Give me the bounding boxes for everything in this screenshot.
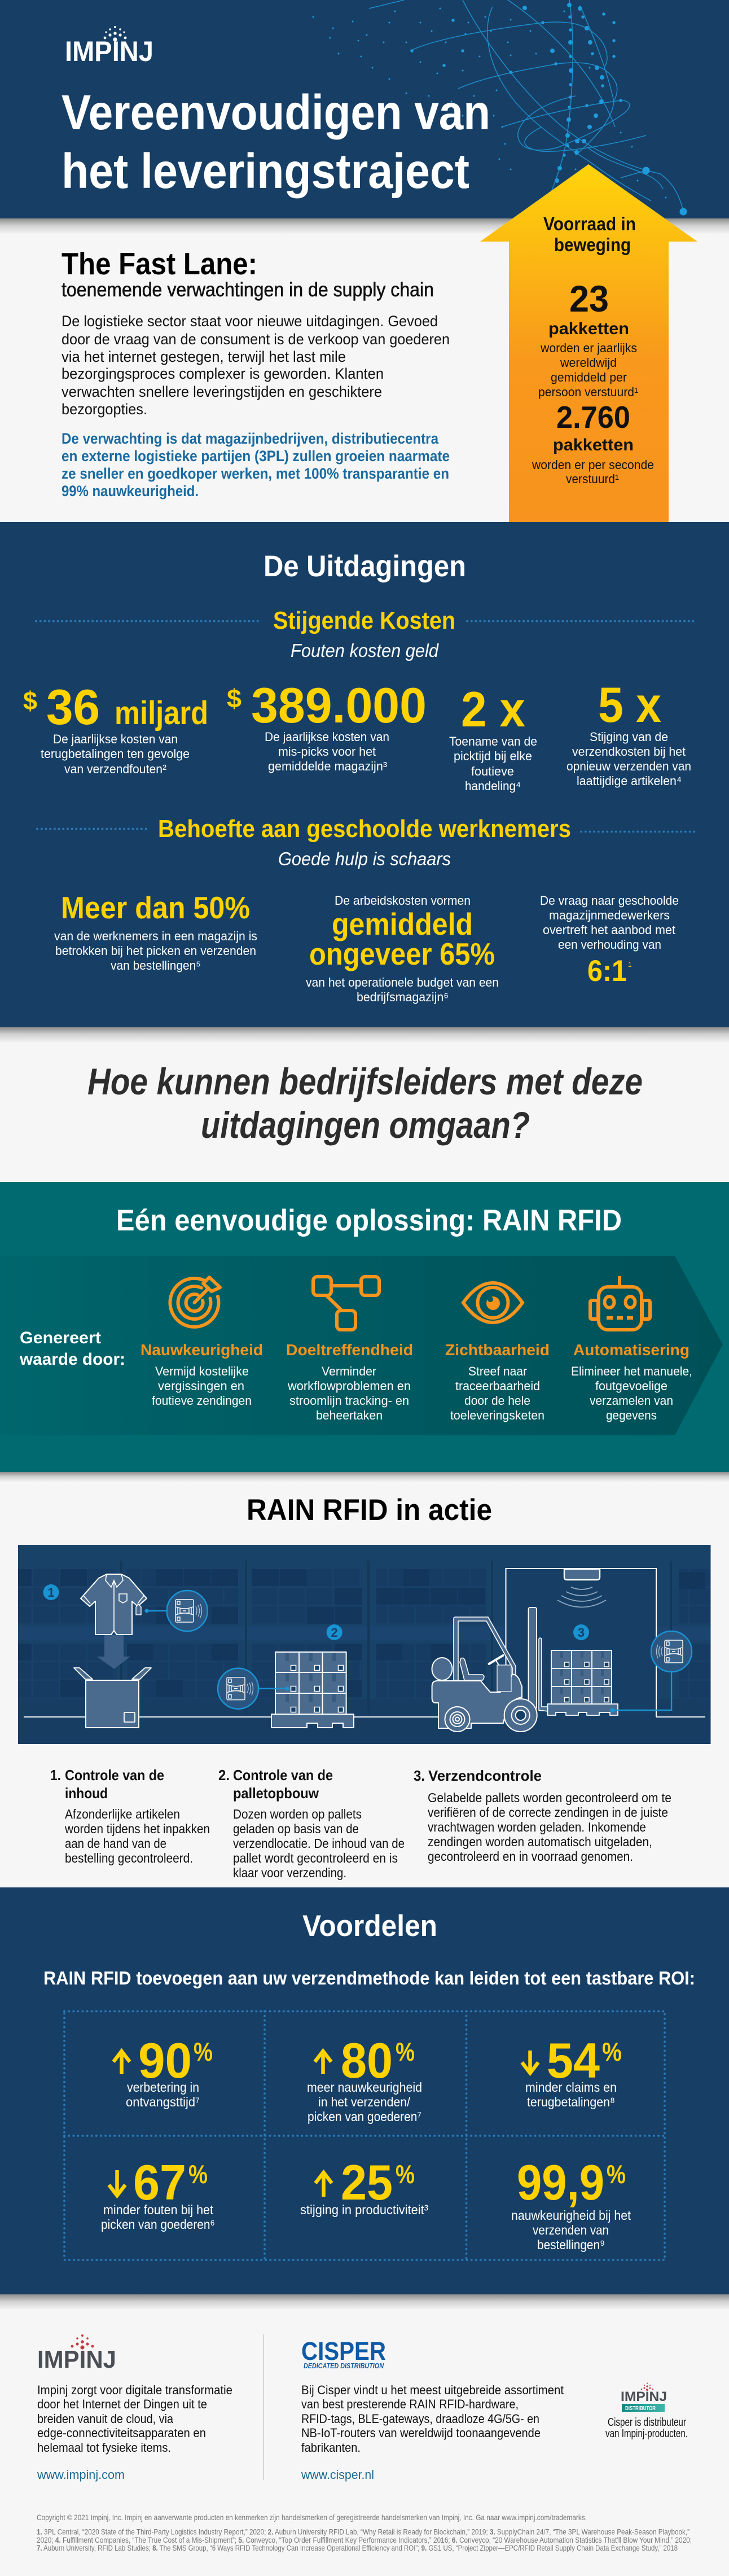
paragraph: helemaal tot fysieke items. (37, 2441, 171, 2455)
paragraph: Bij Cisper vindt u het meest uitgebreide assortiment (301, 2383, 564, 2397)
distributor badge: van Impinj-producten. (605, 2428, 688, 2440)
blue callout paragraph: ze sneller en goedkoper werken, met 100% transparantie en (62, 465, 449, 482)
stat: gemiddeld ongeveer 65%: van het operationele budget van een (306, 975, 499, 989)
icon: robot (590, 1276, 650, 1330)
stat: 23 pakketten: 23 (569, 278, 609, 319)
stat: Meer dan 50%: Meer dan 50% (61, 890, 250, 925)
pallet with boxes 2 (271, 1652, 354, 1728)
stat: 54%: terugbetalingen⁸ (527, 2095, 615, 2109)
paragraph (37, 2383, 232, 2455)
subheading: Stijgende Kosten: Stijgende Kosten (273, 607, 455, 634)
stat: 80%: % (396, 2037, 415, 2066)
column: Doeltreffendheid (286, 1277, 413, 1422)
blue callout paragraph: 99% nauwkeurigheid. (62, 483, 199, 500)
stat: 90%: ontvangsttijd⁷ (126, 2095, 200, 2109)
stat: 5 x: laattijdige artikelen⁴ (577, 774, 682, 788)
column: Zichtbaarheid: Streef naar (468, 1364, 527, 1378)
panel: orange arrow stats (480, 164, 697, 522)
stat: $36 miljard: van verzendfouten² (64, 762, 166, 776)
stat: 90%: verbetering in (127, 2080, 199, 2095)
text block: step 2: verzendlocatie. De inhoud van de (233, 1836, 405, 1851)
stat: 23 pakketten: gemiddeld per (551, 370, 627, 384)
stat: 80%: in het verzenden/ (318, 2095, 411, 2109)
panel: De Uitdagingen (0, 522, 729, 1043)
stat: 25% (300, 2154, 428, 2217)
column: Doeltreffendheid: stroomlijn tracking- en (289, 1394, 409, 1408)
text block: step 2: klaar voor verzending. (233, 1865, 346, 1880)
body paragraph: via het internet gestegen, terwijl het last mile (62, 348, 346, 365)
copyright and references: 7. Auburn University, RFID Lab Studies; 8. The SMS Group, “6 Ways RFID Technology Can Increase Operational Efficiency and ROI”; 9. GS1 US, “Project Zipper—EPC/RFID Retail Supply Chain Data Exchange Study,” 2018 (37, 2543, 678, 2552)
badge 1: 1 (47, 1585, 55, 1600)
stat: $36 miljard: 36 (46, 679, 100, 735)
column: Zichtbaarheid (445, 1283, 550, 1422)
stat: 90%: % (194, 2037, 213, 2066)
logo: Impinj: IMPINJ (65, 36, 153, 67)
paragraph: van best presterende RAIN RFID-hardware, (301, 2397, 519, 2411)
stat: 80% (307, 2032, 422, 2124)
copyright and references: 2020; 4. Fulfillment Companies, “The True Cost of a Mis-Shipment”; 5. Conveyco, “Top Order Fulfillment Key Performance Indicators,” 2016; 6. Conveyco, “20 Warehouse Automation Statistics That’ll Blow Your Mind,” 2020; (37, 2535, 692, 2544)
badge 3: 3 (578, 1626, 585, 1640)
arrow heading: Voorraad in (543, 213, 636, 234)
distributor badge: DISTRIBUTOR (625, 2406, 656, 2412)
text block: step 1: Afzonderlijke artikelen (65, 1807, 180, 1821)
panel: RAIN RFID oplossing (0, 1182, 729, 1482)
stat: 23 pakketten: pakketten (548, 319, 629, 338)
conveyor ground line (24, 1716, 705, 1718)
body paragraph: bezorgingsproces complexer is geworden. Klanten (62, 365, 384, 382)
column: Doeltreffendheid: Doeltreffendheid (286, 1341, 413, 1359)
heading: Eén eenvoudige oplossing: RAIN RFID (116, 1204, 622, 1237)
paragraph: edge-connectiviteitsapparaten en (37, 2426, 206, 2440)
arrow heading: beweging (554, 234, 631, 255)
text block: step 2 (218, 1767, 405, 1880)
column: Zichtbaarheid: Zichtbaarheid (445, 1341, 550, 1359)
text block: step 2: pallet wordt gecontroleerd en is (233, 1851, 398, 1865)
body paragraph: door de vraag van de consument is de verkoop van goederen (62, 331, 450, 348)
panel: Impinj footer (37, 2334, 232, 2482)
icon: workflow nodes (313, 1277, 379, 1330)
icon: eye (463, 1283, 522, 1322)
stat: 99,9%: nauwkeurigheid bij het (511, 2208, 631, 2223)
stat: $389.000: gemiddelde magazijn³ (268, 759, 387, 773)
arrow: shirt into box (97, 1635, 130, 1669)
stat: gemiddeld ongeveer 65% (306, 893, 499, 1004)
stat: 99,9% (511, 2154, 631, 2252)
text block: step 2: Dozen worden op pallets (233, 1807, 362, 1821)
RFID reader (564, 1569, 600, 1580)
column: Automatisering: foutgevoelige (595, 1379, 667, 1393)
column: Doeltreffendheid: workflowproblemen en (287, 1379, 411, 1393)
stat: Meer dan 50%: betrokken bij het picken en verzenden (55, 944, 256, 958)
stat: $389.000 (227, 677, 427, 773)
column: Automatisering: gegevens (606, 1408, 657, 1422)
title (62, 85, 490, 199)
body paragraph: bezorgopties. (62, 401, 147, 418)
stat: 54% (522, 2032, 622, 2109)
stat: $389.000: De jaarlijkse kosten van (265, 730, 389, 744)
label: genereert waarde door (19, 1329, 125, 1369)
stat: Meer dan 50% (54, 890, 257, 972)
text block: step 1 (50, 1767, 210, 1865)
stat: 2 x: 2 x (461, 681, 525, 737)
stat: 5 x: opnieuw verzenden van (566, 759, 691, 773)
column: Nauwkeurigheid: Vermijd kostelijke (155, 1364, 249, 1378)
stat: $36 miljard: terugbetalingen ten gevolge (41, 747, 190, 761)
badge 2 (327, 1624, 342, 1640)
blue callout paragraph: en externe logistieke partijen (3PL) zullen groeien naarmate (62, 448, 450, 465)
label: genereert waarde door: waarde door: (19, 1350, 125, 1369)
stat: 54%: 54 (547, 2032, 600, 2088)
heading: The Fast Lane: The Fast Lane: (62, 246, 257, 281)
subheading: Stijgende Kosten: Fouten kosten geld (291, 640, 440, 661)
question heading (87, 1061, 643, 1146)
stat: 90% (113, 2032, 213, 2109)
dock door (506, 1569, 656, 1717)
subheading: Stijgende Kosten (36, 607, 693, 661)
stat: $36 miljard: De jaarlijkse kosten van (53, 732, 178, 746)
stat: 2 x: picktijd bij elke (454, 749, 532, 763)
stat: 23 pakketten: persoon verstuurd¹ (538, 385, 638, 399)
stat: 54%: minder claims en (525, 2080, 617, 2095)
stat: 25%: % (396, 2159, 415, 2189)
subheading: Behoefte aan geschoolde werknemers: Behoefte aan geschoolde werknemers (158, 815, 571, 843)
text block: step 3 (414, 1767, 671, 1864)
stat: 99,9%: 99,9 (517, 2154, 604, 2210)
column: Nauwkeurigheid: foutieve zendingen (152, 1394, 252, 1408)
stat: 6:1: De vraag naar geschoolde (540, 893, 679, 908)
title: Vereenvoudigen van (62, 85, 490, 140)
logo: Impinj dark: IMPINJ (37, 2346, 116, 2373)
heading: Voordelen (302, 1909, 437, 1943)
stat: 67%: % (188, 2159, 208, 2189)
stat: $36 miljard: miljard (115, 695, 208, 731)
stat: 2 x: Toename van de (449, 734, 537, 748)
stat: 67%: minder fouten bij het (103, 2202, 214, 2217)
arrow heading (543, 213, 636, 255)
dotted grid (64, 2012, 665, 2260)
stat: $36 miljard: $ (23, 686, 37, 715)
subheading: Behoefte aan geschoolde werknemers: Goede hulp is schaars (278, 848, 451, 869)
network artwork (369, 0, 683, 211)
stat: $389.000: $ (227, 684, 241, 713)
copyright and references: Copyright © 2021 Impinj, Inc. Impinj en aanverwante producten en kenmerken zijn handelsmerken of geregistreerde handelsmerken van Impinj, Inc. Ga naar www.impinj.com/trademarks. (37, 2513, 587, 2522)
text block: step 1: 1. (50, 1767, 61, 1784)
divider (263, 2334, 264, 2480)
stat: 2 x: foutieve (471, 764, 514, 778)
column: Automatisering: Elimineer het manuele, (571, 1364, 692, 1378)
text block: step 3: 3. (414, 1767, 425, 1784)
badge 3 (573, 1624, 589, 1640)
logo: Cisper: CISPER (301, 2337, 386, 2365)
label: genereert waarde door: Genereert (20, 1329, 101, 1347)
icon: shirt (81, 1574, 147, 1635)
stat: 25%: 25 (341, 2154, 393, 2210)
stat: 5 x: verzendkosten bij het (572, 744, 686, 759)
paragraph: RFID-tags, BLE-gateways, draadloze 4G/5G- en (301, 2412, 539, 2426)
subheading: toenemende verwachtingen in de supply chain (62, 279, 434, 301)
stat: 90%: 90 (138, 2032, 192, 2088)
blue callout paragraph: De verwachting is dat magazijnbedrijven, distributiecentra (62, 430, 438, 447)
stat: 2.760 pakketten: worden er per seconde (532, 458, 654, 472)
distributor badge (605, 2382, 688, 2440)
badge 2: 2 (331, 1626, 338, 1640)
paragraph: breiden vanuit de cloud, via (37, 2412, 174, 2426)
column: Zichtbaarheid: door de hele (464, 1394, 530, 1408)
stat: $389.000: mis-picks voor het (278, 744, 376, 759)
stat: 5 x (566, 677, 691, 788)
stat: 5 x: 5 x (598, 677, 661, 733)
pallet with boxes 3 (547, 1650, 618, 1715)
blue callout paragraph (62, 430, 450, 500)
text block: step 1: aan de hand van de (65, 1836, 166, 1851)
text block: step 2: geladen op basis van de (233, 1821, 359, 1836)
paragraph: NB-IoT-routers van wereldwijd toonaangevende (301, 2426, 541, 2440)
text block: step 3: Gelabelde pallets worden gecontroleerd om te (428, 1790, 671, 1805)
body paragraph: verwachten snellere leveringstijden en geschiktere (62, 383, 382, 400)
link: www.cisper.nl (301, 2468, 374, 2482)
stat: 99,9%: % (607, 2159, 626, 2189)
illustration: warehouse process (18, 1545, 711, 1744)
stat: 6:1: overtreft het aanbod met (543, 923, 675, 937)
badge 1 (43, 1584, 59, 1600)
stat: $389.000: 389.000 (251, 677, 427, 733)
question heading: Hoe kunnen bedrijfsleiders met deze (87, 1061, 643, 1102)
distributor badge: IMPINJ (621, 2389, 667, 2404)
stat: 80%: meer nauwkeurigheid (307, 2080, 422, 2095)
column: Doeltreffendheid: Verminder (322, 1364, 376, 1378)
text block: step 3: gecontroleerd en in voorraad genomen. (428, 1849, 633, 1864)
stat: 80%: 80 (341, 2032, 393, 2088)
body paragraph: De logistieke sector staat voor nieuwe uitdagingen. Gevoed (62, 313, 438, 330)
heading: De Uitdagingen (264, 550, 466, 583)
column: Nauwkeurigheid (140, 1277, 263, 1408)
stat: 23 pakketten: wereldwijd (560, 356, 617, 370)
distributor badge: Cisper is distributeur (608, 2416, 686, 2429)
stat: 6:1: magazijnmedewerkers (549, 908, 670, 922)
paragraph: door het Internet der Dingen uit te (37, 2397, 207, 2411)
stat: 67% (101, 2154, 215, 2232)
stat: 99,9%: bestellingen⁹ (537, 2237, 605, 2252)
logo: Impinj dark (37, 2334, 116, 2373)
stat: gemiddeld ongeveer 65%: bedrijfsmagazijn⁶ (357, 990, 449, 1004)
subheading: RAIN RFID toevoegen aan uw verzendmethode kan leiden tot een tastbare ROI: (43, 1968, 695, 1988)
paragraph (301, 2383, 564, 2455)
stat: gemiddeld ongeveer 65%: ongeveer 65% (309, 936, 495, 971)
stat: 54%: % (602, 2037, 622, 2066)
stat: 67%: 67 (133, 2154, 186, 2210)
subheading: Behoefte aan geschoolde werknemers (37, 815, 695, 869)
stat: 99,9%: verzenden van (533, 2223, 609, 2237)
RFID tag callout 2 (218, 1668, 289, 1709)
stat: 2.760 pakketten: pakketten (553, 436, 634, 454)
stat: 2.760 pakketten (532, 400, 654, 486)
stat: gemiddeld ongeveer 65%: gemiddeld (332, 906, 473, 941)
text block: step 2: palletopbouw (233, 1785, 319, 1802)
text block: step 1: inhoud (65, 1785, 108, 1802)
column: Zichtbaarheid: traceerbaarheid (455, 1379, 540, 1393)
stat: 67%: picken van goederen⁶ (101, 2217, 215, 2232)
RFID tag callout 3 (610, 1631, 692, 1712)
network dots (313, 5, 683, 212)
body paragraph (62, 313, 450, 418)
copyright and references: 1. 3PL Central, “2020 State of the Third-Party Logistics Industry Report,” 2020; 2. Auburn University RFID Lab, “Why Retail is Ready for Blockchain,” 2019; 3. SupplyChain 24/7, “The 3PL Warehouse Peak-Season Playbook,” (37, 2527, 690, 2536)
text block: step 3: Verzendcontrole (428, 1767, 542, 1784)
forklift (432, 1607, 548, 1732)
panel: Cisper footer (301, 2337, 564, 2482)
heading: RAIN RFID in actie: RAIN RFID in actie (247, 1493, 492, 1527)
stat: Meer dan 50%: van bestellingen⁵ (111, 958, 201, 972)
column: Automatisering: Automatisering (573, 1341, 690, 1359)
panel: header (0, 0, 729, 234)
stat: 6:1: 1 (628, 961, 632, 969)
stat: 6:1 (540, 893, 679, 988)
column: Automatisering: verzamelen van (590, 1394, 673, 1408)
column: Nauwkeurigheid: Nauwkeurigheid (140, 1341, 263, 1359)
copyright and references (37, 2513, 692, 2552)
link: www.impinj.com (37, 2468, 125, 2482)
panel: Voordelen (0, 1887, 729, 2310)
paragraph: Impinj zorgt voor digitale transformatie (37, 2383, 232, 2397)
text block: step 1: worden tijdens het inpakken (64, 1821, 210, 1836)
stat: 5 x: Stijging van de (590, 730, 668, 744)
question heading: uitdagingen omgaan? (201, 1104, 530, 1146)
paragraph: fabrikanten. (301, 2441, 361, 2455)
stat: $36 miljard (23, 679, 208, 776)
panel: intro text (62, 246, 450, 500)
stat: 2 x (449, 681, 537, 793)
column: Automatisering (571, 1276, 692, 1422)
stat: 2.760 pakketten: 2.760 (556, 400, 630, 435)
chevron band (0, 1256, 723, 1435)
stat: 25%: stijging in productiviteit³ (300, 2202, 428, 2217)
RFID tag callout 1 (144, 1591, 208, 1631)
warehouse background (18, 1561, 711, 1744)
column: Zichtbaarheid: toeleveringsketen (450, 1408, 544, 1422)
stat: 2 x: handeling⁴ (465, 779, 521, 793)
text block: step 3: zendingen worden automatisch uitgeladen, (428, 1834, 652, 1849)
icon: target (170, 1277, 220, 1327)
text block: step 3: verifiëren of de correcte zendingen in de juiste (428, 1805, 668, 1820)
text block: step 1: bestelling gecontroleerd. (65, 1851, 193, 1865)
icon: shipping box (74, 1668, 151, 1728)
text block: step 3: vrachtwagen worden geladen. Inkomende (428, 1820, 646, 1834)
column: Nauwkeurigheid: vergissingen en (158, 1379, 244, 1393)
stat: 6:1: een verhouding van (558, 937, 661, 952)
text block: step 1: Controle van de (65, 1767, 164, 1784)
title: het leveringstraject (62, 144, 469, 199)
stat: 23 pakketten: worden er jaarlijks (540, 341, 637, 355)
stat: 6:1: 6:1 (587, 954, 627, 988)
stat: 80%: picken van goederen⁷ (308, 2109, 421, 2124)
stat: 23 pakketten (538, 278, 638, 399)
stat: gemiddeld ongeveer 65%: De arbeidskosten vormen (335, 893, 471, 908)
text block: step 2: 2. (218, 1767, 230, 1784)
text block: step 2: Controle van de (233, 1767, 333, 1784)
stat: 2.760 pakketten: verstuurd¹ (566, 472, 619, 486)
logo: Cisper: DEDICATED DISTRIBUTION (304, 2362, 384, 2370)
stat: Meer dan 50%: van de werknemers in een magazijn is (54, 929, 257, 943)
column: Doeltreffendheid: beheertaken (316, 1408, 383, 1422)
